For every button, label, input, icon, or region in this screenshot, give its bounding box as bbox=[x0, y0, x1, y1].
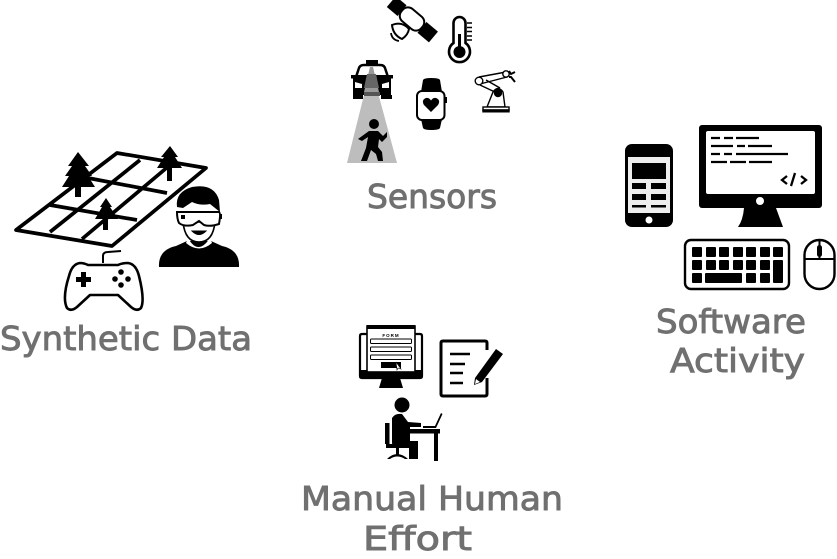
icon: light cone bbox=[347, 67, 397, 163]
icon: form monitor: FORM bbox=[382, 333, 400, 338]
heading: Sensors: Sensors bbox=[367, 177, 497, 216]
icon: notepad and pencil bbox=[441, 341, 503, 396]
icon: person at laptop bbox=[385, 398, 442, 461]
icon: center tree bbox=[95, 198, 118, 230]
heading: Manual Human Effort bbox=[301, 479, 563, 558]
heading: Software Activity: Software bbox=[656, 302, 806, 341]
icon: map grid bbox=[16, 153, 206, 246]
icon: form monitor bbox=[360, 325, 422, 388]
icon: game controller bbox=[65, 251, 143, 310]
icon: mouse bbox=[804, 240, 834, 289]
icon: right tree bbox=[157, 146, 182, 181]
icon: smartwatch bbox=[417, 78, 447, 130]
icon: keyboard bbox=[685, 240, 789, 289]
panel: sensors bbox=[347, 0, 515, 216]
heading: Software Activity bbox=[656, 302, 806, 380]
icon: person with VR headset bbox=[159, 186, 239, 267]
icon: smartphone bbox=[625, 144, 673, 227]
icon: robot arm bbox=[475, 71, 515, 112]
panel: software activity bbox=[625, 125, 834, 380]
heading: Manual Human Effort: Manual Human bbox=[301, 479, 563, 518]
icon: satellite bbox=[386, 0, 439, 43]
icon: pedestrian bbox=[358, 119, 387, 161]
heading: Manual Human Effort: Effort bbox=[363, 519, 472, 558]
icon: large tree bbox=[62, 152, 95, 197]
heading: Software Activity: Activity bbox=[670, 341, 805, 380]
icon: thermometer bbox=[449, 17, 472, 62]
heading: Synthetic Data: Synthetic Data bbox=[0, 319, 252, 358]
icon: taxi bbox=[351, 60, 393, 99]
panel: manual human effort bbox=[301, 325, 563, 558]
icon: code monitor bbox=[699, 125, 822, 227]
panel: synthetic data bbox=[0, 146, 252, 358]
